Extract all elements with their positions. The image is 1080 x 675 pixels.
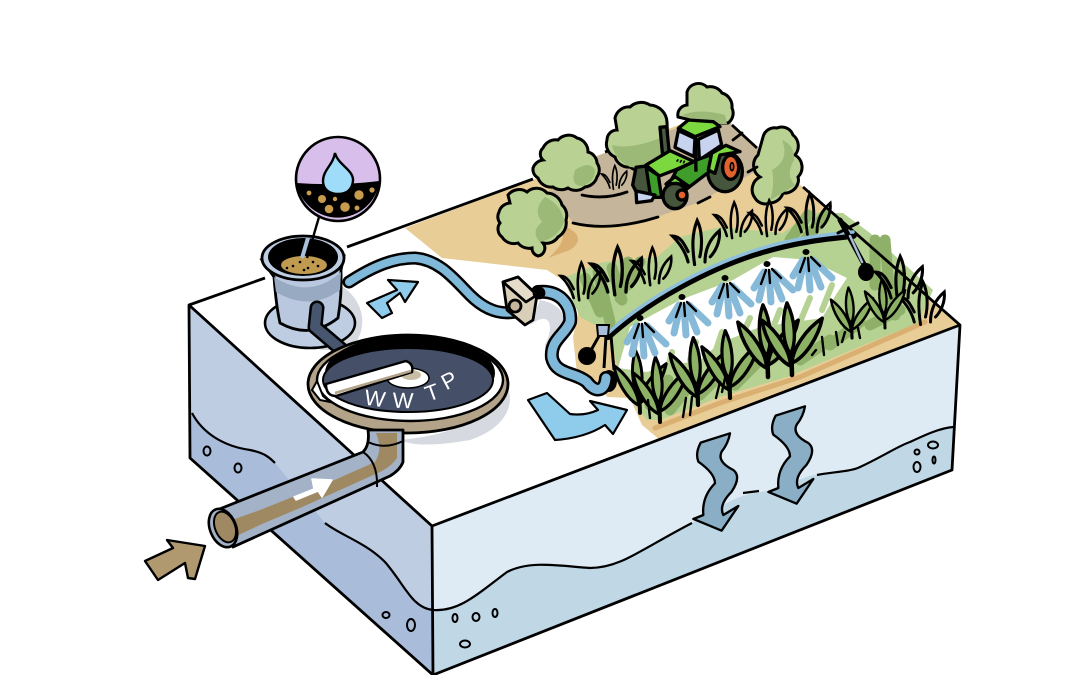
field crop area <box>563 213 933 420</box>
scraper arm <box>326 361 412 396</box>
crop plants <box>610 280 908 422</box>
grass tufts <box>560 166 944 324</box>
infiltration arrow right <box>768 406 813 504</box>
WWTP label <box>363 366 462 413</box>
tree: right <box>752 127 802 204</box>
block outlines <box>189 125 960 675</box>
block top surface <box>189 111 960 526</box>
grey ground shadows <box>320 285 600 445</box>
watered strip <box>618 257 847 372</box>
infiltration arrow left <box>693 433 738 531</box>
tree: back right <box>678 83 733 124</box>
irrigation boom <box>608 220 866 336</box>
WWTP label: T <box>422 378 443 407</box>
tree: back left <box>533 135 599 190</box>
flow arrow: to field <box>528 393 627 440</box>
WWTP label: W <box>363 385 387 412</box>
inlet arrow <box>145 540 205 580</box>
block right face <box>432 325 960 675</box>
block left face <box>189 305 433 675</box>
WWTP label: W <box>392 388 414 413</box>
cup base <box>265 298 355 348</box>
tree: centre <box>606 102 668 171</box>
tractor <box>633 120 742 209</box>
WWTP label: P <box>437 366 462 395</box>
tree: front left <box>498 188 567 256</box>
inlet pipe with elbow <box>203 430 403 551</box>
infiltration cup <box>262 217 344 330</box>
white flow arrow in pipe <box>294 479 332 500</box>
WWTP tank <box>308 335 508 433</box>
boom wheels and tower <box>578 263 874 392</box>
flow arrow: cup to pump <box>367 280 418 318</box>
hose: cup to pump <box>349 258 516 313</box>
magnifier circle <box>296 137 380 221</box>
outlet pipe from cup to WWTP <box>315 308 342 350</box>
irrigation sprayers <box>627 249 832 356</box>
hub <box>387 368 429 388</box>
hose: pump to sprinkler <box>538 292 606 389</box>
gravel yard <box>550 113 762 226</box>
pump box <box>503 277 544 325</box>
yard road markings <box>573 133 757 226</box>
sandy ground <box>405 111 960 440</box>
